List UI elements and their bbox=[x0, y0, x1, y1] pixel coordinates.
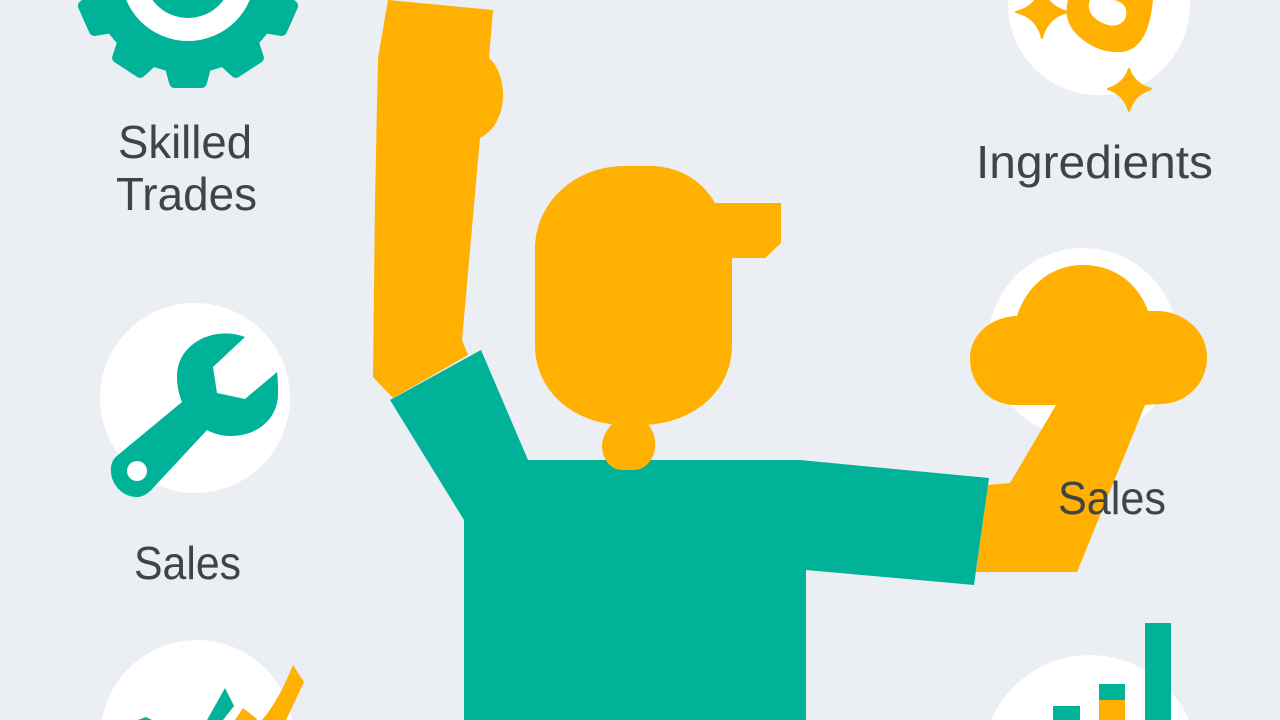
icon: sparkle ingredient bbox=[1008, 0, 1190, 111]
label: Skilled Trades: Trades bbox=[116, 168, 257, 220]
neck bbox=[602, 424, 655, 470]
label: Sales left: Sales bbox=[134, 537, 241, 589]
figure: worker bbox=[373, 0, 1207, 720]
label: Ingredients: Ingredients bbox=[976, 136, 1213, 188]
torso and sleeves bbox=[390, 350, 989, 720]
raised arm bbox=[373, 0, 503, 398]
label: Skilled Trades bbox=[116, 116, 257, 220]
head with cap bbox=[535, 166, 781, 425]
label: Sales right: Sales bbox=[1058, 472, 1166, 524]
icon: cloud backdrop circle bbox=[988, 248, 1178, 438]
icon: bar chart bbox=[991, 623, 1189, 720]
icon: growth chart check bbox=[102, 640, 304, 720]
label: Skilled Trades: Skilled bbox=[118, 116, 252, 168]
forearm and hand bbox=[970, 265, 1207, 572]
icon: wrench bbox=[100, 303, 290, 497]
icon: gear bbox=[74, 0, 302, 88]
